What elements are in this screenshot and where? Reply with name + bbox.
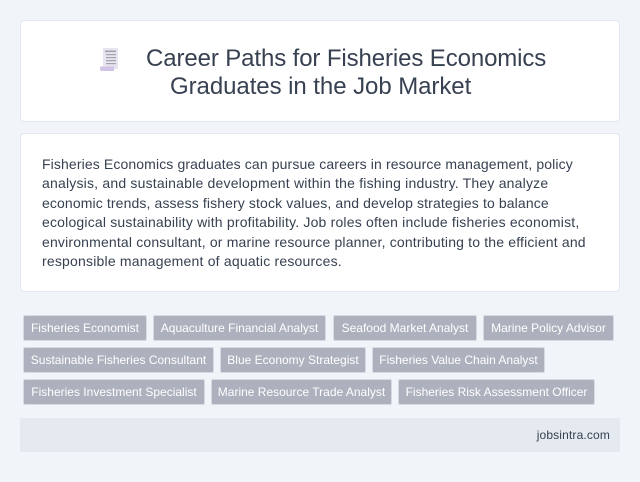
tag (23, 347, 214, 373)
tag: Marine Policy Advisor (491, 321, 606, 335)
tag: Blue Economy Strategist (227, 353, 359, 367)
tag: Fisheries Investment Specialist (31, 385, 197, 399)
tag: Fisheries Value Chain Analyst (379, 353, 538, 367)
tag (23, 315, 147, 341)
title: Career Paths for Fisheries Economics (146, 45, 546, 72)
description text: analysis, and sustainable development within the fishing industry. They analyze (42, 175, 548, 191)
panel: description card (20, 133, 620, 292)
tag: Seafood Market Analyst (342, 321, 468, 335)
footer source: jobsintra.com (537, 428, 610, 442)
tag (333, 315, 477, 341)
icon: document scroll (100, 48, 118, 71)
description text: ecological sustainability with profitability. Job roles often include fisheries economist, (42, 214, 579, 230)
tag (372, 347, 545, 373)
tag: Sustainable Fisheries Consultant (31, 353, 206, 367)
tag (398, 379, 595, 405)
tag (23, 379, 205, 405)
description text: Fisheries Economics graduates can pursue careers in resource management, policy (42, 156, 573, 172)
title: Graduates in the Job Market (170, 73, 471, 100)
panel: title card (20, 20, 620, 122)
panel: job role tags (23, 315, 614, 405)
description text: responsible management of aquatic resources. (42, 252, 342, 268)
tag (211, 379, 392, 405)
tag (483, 315, 614, 341)
title (146, 45, 546, 100)
tag (153, 315, 326, 341)
description text (42, 156, 586, 269)
tag: Fisheries Risk Assessment Officer (406, 385, 587, 399)
footer bar (20, 418, 620, 452)
description text: economic trends, assess fishery stock values, and develop strategies to balance (42, 194, 549, 210)
tag: Marine Resource Trade Analyst (218, 385, 385, 399)
tag: Aquaculture Financial Analyst (161, 321, 318, 335)
description text: environmental consultant, or marine resource planner, contributing to the efficient and (42, 234, 586, 250)
tag: Fisheries Economist (31, 321, 139, 335)
tag (220, 347, 366, 373)
